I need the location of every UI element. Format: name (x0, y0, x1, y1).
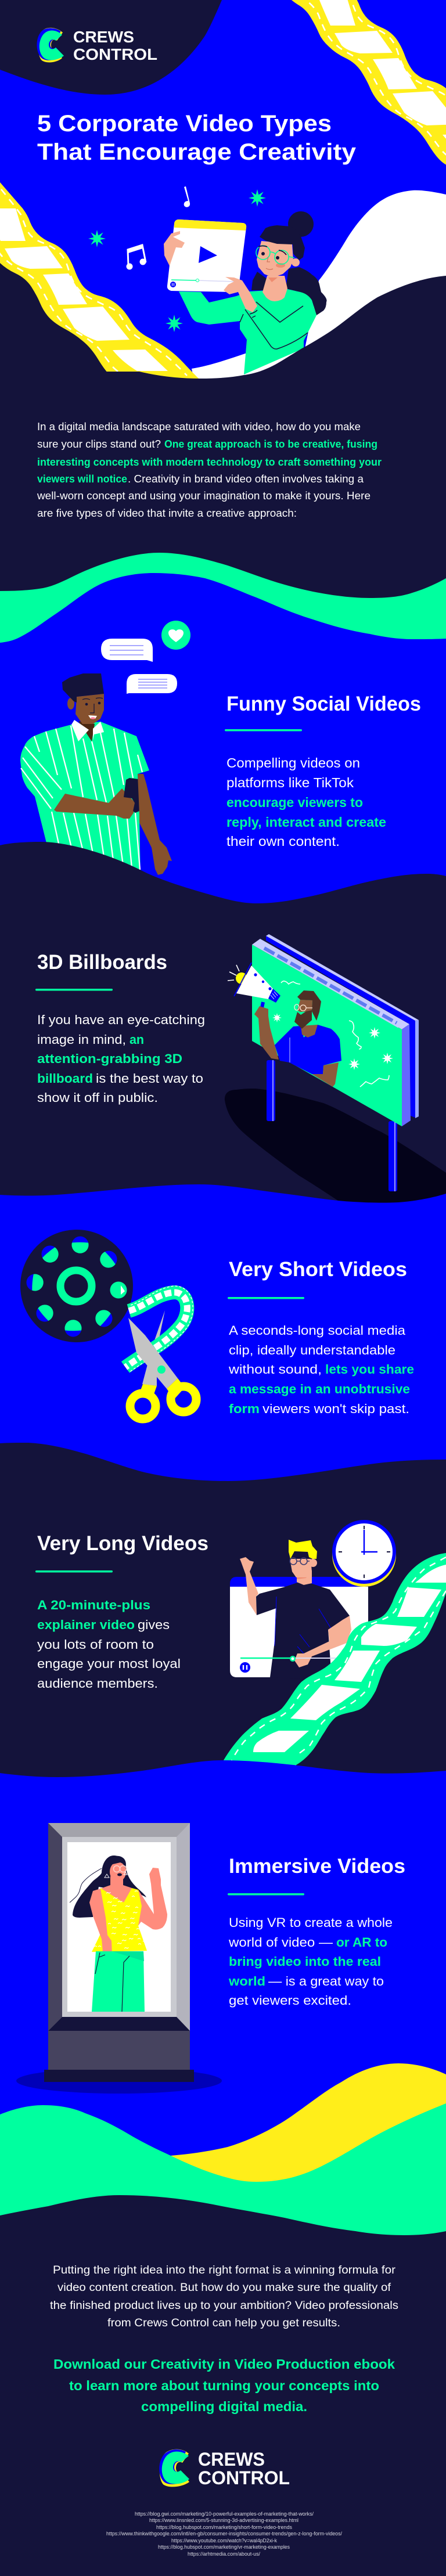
panel: funny social videos (0, 573, 446, 882)
billboard decorations (272, 1013, 393, 1070)
left hand (164, 231, 185, 266)
title: That Encourage Creativity (37, 139, 357, 165)
heading: Very Short Videos (229, 1258, 407, 1281)
panel: hero (0, 0, 446, 644)
body text: bring video into the real (229, 1954, 381, 1969)
body text: you lots of room to (37, 1637, 154, 1652)
dark wave background (0, 842, 446, 1219)
shirt (20, 722, 149, 882)
woman on screen (70, 1856, 167, 2012)
pants (92, 1951, 145, 2012)
logo: crews control: CREWS (198, 2449, 265, 2470)
shirt stripes (21, 726, 142, 870)
hair (289, 1540, 317, 1559)
man in billboard (254, 990, 341, 1087)
hair back (286, 267, 327, 315)
facial features (85, 703, 88, 705)
text block: intro: . Creativity in brand video often involves taking a (128, 473, 364, 485)
earrings (105, 1872, 127, 1878)
white wave (192, 190, 446, 383)
glasses (290, 1558, 297, 1565)
heading: 3D Billboards (37, 951, 167, 974)
green film strip (222, 1553, 446, 1771)
billboard shadow (225, 1089, 446, 1208)
forearm (54, 788, 135, 819)
window (230, 1587, 368, 1677)
progress bar (293, 1658, 341, 1659)
heading: Immersive Videos (229, 1855, 405, 1878)
body text: Compelling videos on (226, 755, 360, 770)
lower left dark ground (0, 255, 113, 383)
body text (228, 1323, 414, 1416)
body text: engage your most loyal (37, 1656, 181, 1671)
clock (332, 1520, 396, 1587)
text block: intro: are five types of video that invite a creative approach: (37, 507, 297, 519)
underline (228, 1893, 304, 1895)
icon: speech bubble right (127, 674, 177, 694)
hair bun (288, 211, 314, 237)
collar (71, 720, 89, 741)
neck (262, 276, 287, 301)
logo: crews control (37, 28, 157, 63)
face (110, 1862, 126, 1882)
panel: very short videos (0, 1184, 446, 1463)
right hand and forearm (224, 277, 257, 312)
head (290, 1559, 312, 1577)
body text (37, 1013, 205, 1105)
tablet (167, 219, 246, 292)
closing paragraph: from Crews Control can help you get results. (107, 2317, 340, 2329)
body text: gives (138, 1617, 170, 1632)
source links: https://arhtmedia.com/about-us/ (188, 2551, 260, 2557)
body text: a message in an unobtrusive (229, 1382, 410, 1396)
icon: heart bubble (161, 621, 190, 650)
closing paragraph: video content creation. But how do you make sure the quality of (57, 2282, 391, 2294)
body text: clip, ideally understandable (229, 1343, 395, 1357)
body text (228, 1915, 393, 2008)
call to action: Download our Creativity in Video Production ebook (53, 2357, 395, 2372)
megaphone (228, 963, 280, 1019)
illustration: man with phone (20, 673, 149, 882)
closing paragraph (50, 2264, 398, 2329)
source links: https://www.youtube.com/watch?v=wal4pD2xi-k (171, 2538, 277, 2544)
icon: film reel (20, 1230, 133, 1342)
body text: an (130, 1032, 144, 1047)
sweater (179, 289, 316, 374)
icon: music note (184, 186, 190, 207)
body text (226, 755, 386, 849)
body text: get viewers excited. (229, 1993, 351, 2008)
body text: audience members. (37, 1676, 158, 1691)
left arm (89, 1889, 112, 1958)
call to action: to learn more about turning your concepts into (69, 2378, 379, 2393)
blue wave background (0, 573, 446, 882)
icons: green stars (88, 189, 266, 332)
body text: form (229, 1402, 260, 1416)
fringe (107, 1856, 126, 1871)
glasses (114, 1866, 120, 1872)
logo: crews control: CREWS (73, 28, 134, 46)
dark wave background (0, 2195, 446, 2576)
blue wave background (0, 1184, 446, 1463)
head (75, 694, 104, 724)
body text: — is a great way to (268, 1974, 384, 1988)
source links: https://blog.hubspot.com/marketing/vr-marketing-examples (158, 2544, 290, 2550)
body text: world of video — (228, 1935, 333, 1950)
text block: intro: sure your clips stand out? (37, 438, 161, 450)
body text: billboard (37, 1071, 93, 1086)
body text: attention-grabbing 3D (37, 1051, 182, 1066)
text block: intro: In a digital media landscape saturated with video, how do you make (37, 421, 361, 433)
body text: Using VR to create a whole (229, 1915, 393, 1930)
body text (37, 1598, 181, 1691)
body text: explainer video (37, 1617, 135, 1632)
glasses and eyes (256, 246, 270, 260)
closing paragraph: Putting the right idea into the right format is a winning formula for (53, 2264, 396, 2276)
illustration: video window with presenter (230, 1520, 396, 1681)
text block: intro (37, 421, 382, 519)
body text: encourage viewers to (226, 795, 363, 810)
film strip top right (256, 0, 446, 174)
text block: intro: One great approach is to be creative, fusing (164, 438, 377, 450)
film strip bottom left (0, 182, 204, 390)
hair (73, 1856, 146, 1918)
body text: image in mind, (37, 1032, 126, 1047)
title: 5 Corporate Video Types (37, 111, 332, 136)
heading: Very Long Videos (37, 1532, 208, 1555)
icon: scissors cutting film (125, 1286, 196, 1419)
dark wave foreground (0, 276, 446, 644)
yellow wave (171, 2063, 446, 2206)
underline (35, 1570, 113, 1572)
underline (228, 1297, 304, 1299)
body text: is the best way to (96, 1071, 203, 1086)
body text: world (228, 1974, 265, 1988)
right arm (294, 1616, 351, 1667)
source links: https://www.thinkwithgoogle.com/intl/en-gb/consumer-insights/consumer-trends/gen-z-long-form-videos/ (106, 2531, 342, 2537)
neck and chest (100, 1876, 132, 1904)
underline (35, 989, 113, 990)
panel: immersive videos (0, 1760, 446, 2264)
top corner blob (0, 0, 222, 95)
icon: speech bubble left (101, 639, 153, 662)
body text: their own content. (226, 834, 340, 849)
pause button (240, 1662, 250, 1673)
body text: A seconds-long social media (229, 1323, 406, 1338)
source links: https://blog.hubspot.com/marketing/short-form-video-trends (156, 2524, 292, 2531)
blue wave background (0, 1760, 446, 2264)
panel: closing (0, 2195, 446, 2576)
posts (267, 1060, 275, 1121)
logo: crews control (159, 2449, 290, 2488)
body text: platforms like TikTok (226, 775, 354, 790)
green wave band (0, 553, 446, 656)
source links: https://blog.gwi.com/marketing/10-powerful-examples-of-marketing-that-works/ (135, 2511, 314, 2517)
logo: crews control: CONTROL (73, 45, 157, 63)
body text: or AR to (336, 1935, 387, 1950)
body text: show it off in public. (37, 1090, 158, 1105)
body text: If you have an eye-catching (37, 1013, 205, 1027)
body text: without sound, (228, 1362, 322, 1377)
panel: very long videos (0, 1443, 446, 1800)
sweater fold lines (240, 302, 308, 349)
body text: A 20-minute-plus (37, 1598, 150, 1612)
text block: intro: viewers will notice (37, 473, 127, 485)
body text: reply, interact and create (226, 815, 386, 830)
heading: Funny Social Videos (226, 693, 421, 715)
call to action: compelling digital media. (141, 2399, 307, 2414)
title (37, 111, 357, 165)
illustration: billboard (228, 934, 419, 1191)
illustration: AR kiosk (16, 1823, 222, 2094)
green wave (0, 2103, 446, 2264)
pattern on top (94, 1890, 146, 1948)
face (257, 241, 293, 278)
closing paragraph: the finished product lives up to your ambition? Video professionals (50, 2300, 398, 2312)
source links: https://www.linsnled.com/5-stunning-3d-advertising-examples.html (149, 2517, 298, 2524)
waving arm (240, 1557, 258, 1615)
shirt (256, 1583, 350, 1681)
logo: crews control: CONTROL (198, 2467, 290, 2488)
neck (78, 721, 95, 741)
source links (106, 2511, 342, 2557)
hair (62, 673, 104, 702)
body text: lets you share (325, 1362, 414, 1377)
dark wave background (0, 1443, 446, 1800)
right arm (138, 1868, 167, 1930)
underline (225, 729, 302, 732)
icon: double music note (127, 245, 146, 269)
phone (124, 778, 146, 813)
top (92, 1888, 147, 1952)
illustration: woman with video tablet (164, 211, 327, 374)
back panel (266, 936, 415, 1118)
text block: intro: well-worn concept and using your imagination to make it yours. Here (37, 490, 371, 502)
neck (297, 1570, 312, 1585)
man's hanging arm (138, 774, 172, 875)
panel: 3D billboards (0, 774, 446, 1219)
call to action (53, 2357, 395, 2414)
text block: intro: interesting concepts with modern technology to craft something your (37, 456, 382, 468)
light tiles (260, 945, 400, 1025)
green face (252, 945, 402, 1126)
body text: viewers won't skip past. (262, 1402, 409, 1416)
hair top (260, 225, 305, 260)
